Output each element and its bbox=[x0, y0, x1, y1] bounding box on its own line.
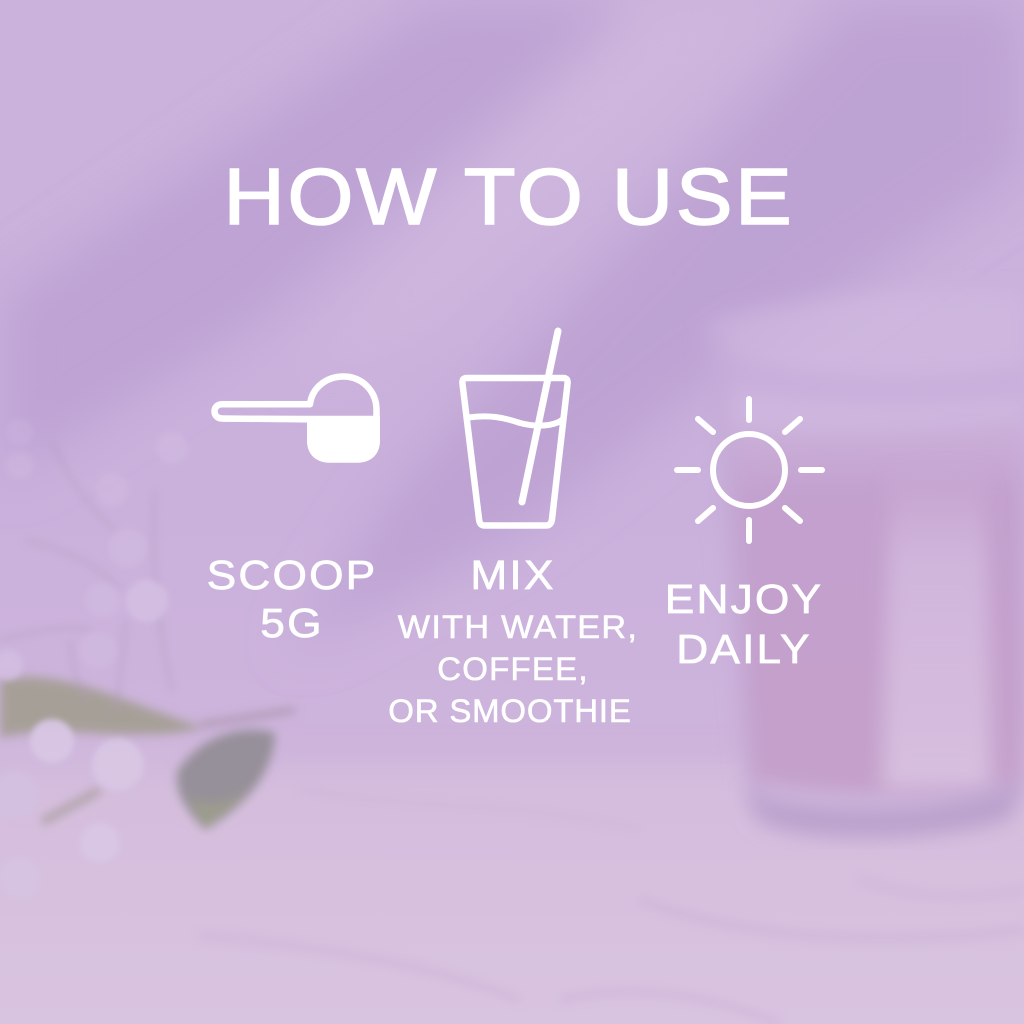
step detail: with water, coffee, or smoothie bbox=[388, 609, 638, 729]
step label: enjoy daily: DAILY bbox=[676, 626, 812, 672]
step detail: with water, coffee, or smoothie: WITH WATER, bbox=[398, 609, 638, 645]
step detail: with water, coffee, or smoothie: COFFEE, bbox=[437, 651, 589, 687]
icon: glass with straw bbox=[459, 328, 571, 529]
glass bbox=[705, 291, 1024, 831]
step label: scoop 5g bbox=[207, 552, 377, 646]
step label: enjoy daily bbox=[665, 576, 823, 672]
step label: mix: MIX bbox=[470, 552, 556, 598]
diagonal shadows bbox=[0, 0, 1024, 650]
icon: sun bbox=[674, 396, 825, 544]
step label: enjoy daily: ENJOY bbox=[665, 576, 823, 622]
title: HOW TO USE bbox=[224, 152, 794, 241]
step label: scoop 5g: 5G bbox=[260, 600, 324, 646]
step detail: with water, coffee, or smoothie: OR SMOOTHIE bbox=[388, 693, 632, 729]
icon: measuring scoop bbox=[211, 373, 380, 463]
table marble bbox=[200, 790, 1024, 1024]
table edge shadow bbox=[280, 728, 750, 758]
step label: scoop 5g: SCOOP bbox=[207, 552, 377, 598]
flowers and leaves bbox=[0, 677, 205, 738]
